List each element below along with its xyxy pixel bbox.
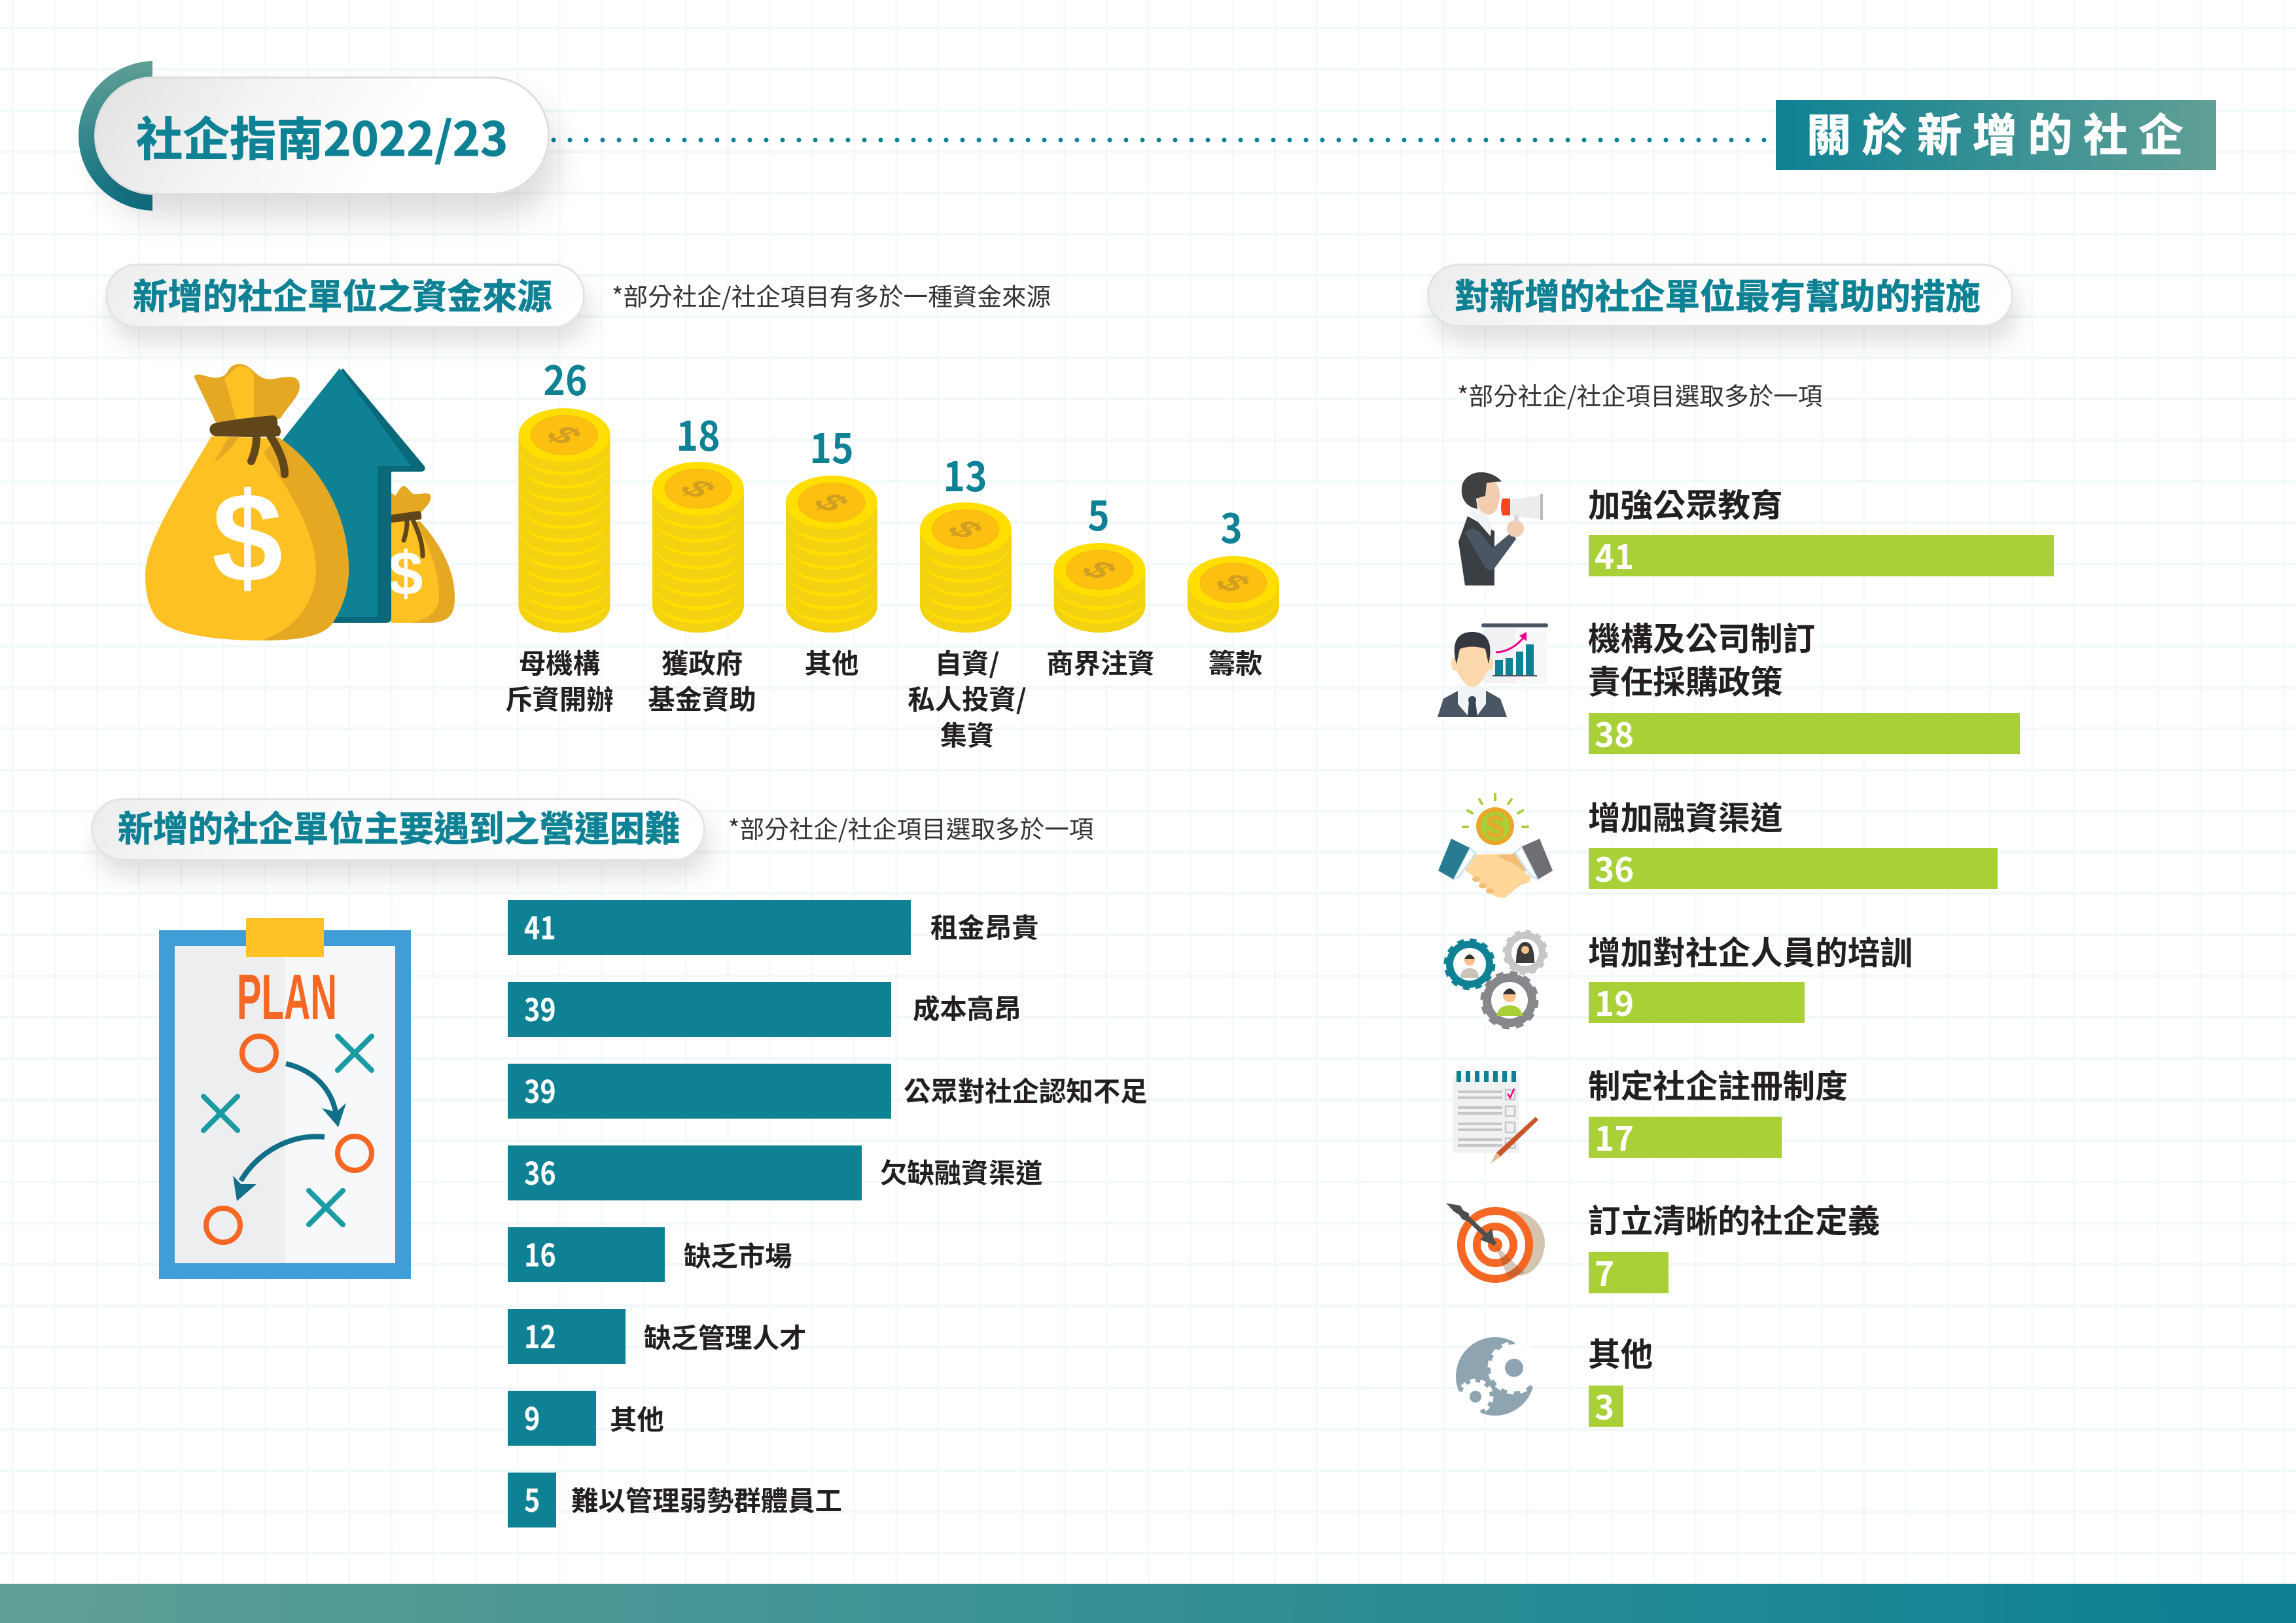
stack 15 <box>786 476 877 633</box>
bar: high rent <box>508 900 911 955</box>
label: procurement policy <box>1588 613 1815 703</box>
bar: other: 3 <box>1595 1381 1614 1429</box>
bar: high cost: 39 <box>524 985 556 1030</box>
value 15: 15 <box>809 416 854 475</box>
icon: plan clipboard <box>159 918 411 1279</box>
bar: public education: 41 <box>1595 531 1634 579</box>
label: government fund: 獲政府 <box>662 642 743 681</box>
bar: high cost <box>508 982 891 1037</box>
icon: handshake with coin: $ <box>1486 809 1504 845</box>
label: self funded: 自資/ <box>935 642 999 681</box>
small bag <box>389 486 455 623</box>
label: disadvantaged staff: 難以管理弱勢群體員工 <box>571 1479 842 1518</box>
bar: market: 16 <box>524 1230 556 1276</box>
stack 5: $ <box>1070 556 1127 584</box>
label: parent organisation: 母機構 <box>519 642 600 681</box>
label: government fund: 基金資助 <box>648 678 756 717</box>
big bag <box>145 364 349 640</box>
value 3: 3 <box>1220 496 1243 555</box>
bar: public education <box>1589 535 2054 576</box>
bar: staff training <box>1589 982 1805 1023</box>
label: market: 缺乏市場 <box>684 1234 792 1274</box>
label: business capital: 商界注資 <box>1046 642 1155 681</box>
bar: procurement policy: 38 <box>1595 708 1634 757</box>
bar: other: 9 <box>524 1393 540 1439</box>
note: helpful measures: *部分社企/社企項目選取多於一項 <box>1457 376 1822 412</box>
value 5: 5 <box>1087 483 1110 542</box>
growth arrow <box>262 368 425 623</box>
icon: target with arrow <box>1446 1203 1545 1283</box>
title crescent accent <box>79 61 152 211</box>
coin stack chart <box>518 408 1279 633</box>
label: financing channels: 欠缺融資渠道 <box>880 1151 1042 1191</box>
bar: registration system: 17 <box>1595 1112 1634 1161</box>
bar: public awareness: 39 <box>524 1066 556 1112</box>
bar: financing channels: 36 <box>1595 843 1634 892</box>
bar: financing channels <box>1589 848 1998 889</box>
label: parent organisation: 斥資開辦 <box>505 678 614 717</box>
label: financing channels: 增加融資渠道 <box>1588 792 1783 839</box>
stack 18: $ <box>669 475 726 502</box>
bar: high rent: 41 <box>524 903 556 949</box>
footer band <box>0 1584 2296 1623</box>
label: procurement policy: 機構及公司制訂 <box>1588 613 1815 660</box>
label: clear definition: 訂立清晰的社企定義 <box>1588 1195 1880 1242</box>
heading: funding sources <box>105 264 585 328</box>
bar: clear definition <box>1589 1252 1669 1293</box>
bar: clear definition: 7 <box>1595 1248 1614 1296</box>
icon: other, moon with gears <box>1456 1337 1533 1416</box>
stack 13 <box>920 502 1012 633</box>
stack 26 <box>518 408 610 633</box>
stack 26: $ <box>535 421 592 449</box>
label: public education: 加強公眾教育 <box>1588 480 1783 527</box>
bar: disadvantaged staff <box>508 1473 556 1527</box>
label: other: 其他 <box>805 642 858 681</box>
icon: registration checklist with pencil <box>1453 1071 1538 1164</box>
stack 5 <box>1053 543 1145 633</box>
note: funding sources: *部分社企/社企項目有多於一種資金來源 <box>612 277 1051 313</box>
bar: financing channels: 36 <box>524 1148 556 1194</box>
banner text: 關於新增的社企 <box>1807 99 2194 164</box>
heading text: 新增的社企單位之資金來源 <box>133 269 552 319</box>
stack 3 <box>1188 556 1279 633</box>
heading: helpful measures <box>1427 264 2013 327</box>
stack 18 <box>652 462 744 633</box>
icon: handshake with coin <box>1438 793 1553 898</box>
label: self funded: 集資 <box>940 714 994 753</box>
label: parent organisation <box>505 642 614 717</box>
label: self funded: 私人投資/ <box>908 678 1027 717</box>
icon: money bags and arrow <box>145 364 455 640</box>
label: government fund <box>648 642 756 717</box>
label: procurement policy: 責任採購政策 <box>1588 656 1783 703</box>
label: high cost: 成本高昂 <box>913 987 1021 1026</box>
icon: presenter with chart <box>1438 623 1548 717</box>
value 13: 13 <box>943 444 987 503</box>
label: high rent: 租金昂貴 <box>930 906 1039 945</box>
big bag: $ <box>212 466 283 609</box>
stack 13: $ <box>937 515 994 543</box>
icon: staff gears <box>1443 930 1548 1030</box>
heading text: 對新增的社企單位最有幫助的措施 <box>1455 269 1981 319</box>
header banner <box>1776 100 2216 170</box>
label: talent: 缺乏管理人才 <box>644 1316 806 1355</box>
label: other: 其他 <box>610 1398 664 1437</box>
bar: market <box>508 1227 665 1282</box>
label: registration system: 制定社企註冊制度 <box>1588 1060 1848 1108</box>
bar: financing channels <box>508 1145 862 1200</box>
note: operating difficulties: *部分社企/社企項目選取多於一項 <box>728 809 1093 845</box>
bar: disadvantaged staff: 5 <box>524 1475 540 1521</box>
bar: procurement policy <box>1589 713 2020 754</box>
stack 3: $ <box>1205 569 1262 597</box>
bar: talent <box>508 1309 626 1364</box>
bar: other <box>508 1391 596 1446</box>
dotted header line <box>551 137 1767 143</box>
heading: operating difficulties <box>91 798 705 861</box>
stack 15: $ <box>803 489 860 516</box>
bar: staff training: 19 <box>1595 977 1634 1026</box>
title text: 社企指南2022/23 <box>136 101 508 169</box>
bar: public awareness <box>508 1064 891 1119</box>
small bag: $ <box>389 539 423 608</box>
label: other: 其他 <box>1588 1329 1653 1376</box>
bar: other <box>1589 1386 1623 1427</box>
label: self funded <box>908 642 1027 753</box>
icon: plan clipboard: PLAN <box>237 961 337 1033</box>
label: fundraising: 籌款 <box>1209 642 1262 681</box>
heading text: 新增的社企單位主要遇到之營運困難 <box>118 801 680 852</box>
bar: registration system <box>1589 1117 1782 1158</box>
label: staff training: 增加對社企人員的培訓 <box>1588 927 1913 974</box>
bar: talent: 12 <box>524 1312 556 1357</box>
value 18: 18 <box>676 404 720 462</box>
icon: person with megaphone <box>1458 472 1543 585</box>
value 26: 26 <box>543 348 588 407</box>
label: public awareness: 公眾對社企認知不足 <box>904 1070 1148 1109</box>
title pill <box>94 77 550 195</box>
